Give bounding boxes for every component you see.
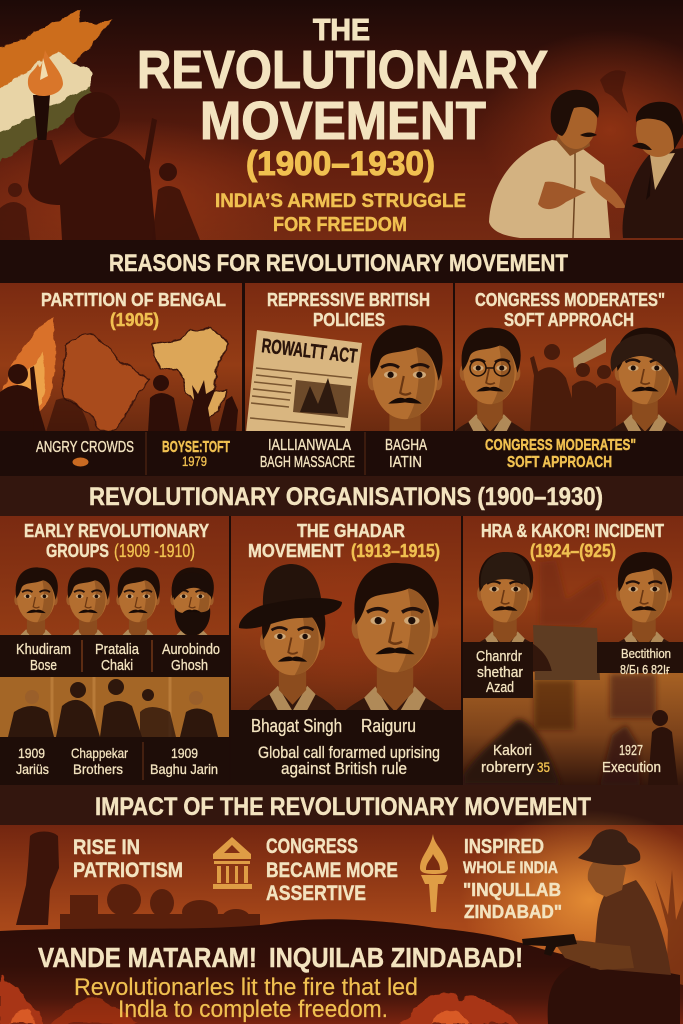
subtitle: INDIA’S ARMED STRUGGLE [215, 191, 466, 212]
text: inspired whole india: "INQULLAB [463, 880, 561, 900]
panel: early revolutionary groups [0, 516, 229, 737]
text: rise in patriotism: PATRIOTISM [73, 859, 183, 882]
name: khudiram bose: Bose [30, 657, 57, 674]
name box: bectithion: Bectithion [621, 646, 671, 661]
heading: THE GHADAR [297, 521, 405, 541]
portrait: rajguru [346, 562, 444, 710]
caption: massacre: BAGH MASSACRE [260, 454, 355, 471]
heading: PARTITION OF BENGAL [41, 290, 226, 310]
text: rise in patriotism: RISE IN [73, 836, 140, 859]
name: pratalia chaki [95, 641, 140, 674]
name box: chandrashekhar: Chanrdr [476, 648, 522, 665]
caption: massacre: IALLIANWALA [268, 437, 351, 454]
title: THE [313, 12, 370, 47]
heading [475, 290, 665, 330]
text: inspired whole india: WHOLE INDIA [463, 858, 558, 877]
heading [24, 521, 209, 561]
name: bhagat singh: Bhagat Singh [251, 716, 342, 736]
caption: bagha [385, 437, 427, 471]
subtitle [215, 191, 466, 236]
heading: (1909 -1910) [114, 541, 195, 561]
newspaper: rowlatt act: ROWALTT ACT [260, 335, 358, 368]
panel: impact [0, 810, 683, 1024]
map: bengal, light [152, 328, 228, 420]
tree at right edge [655, 870, 683, 1024]
name box: bectithion: 8/Бı 6 82Iғ [620, 662, 670, 677]
heading: (1905) [110, 310, 159, 330]
caption: 1927 execution: Execution [602, 759, 661, 776]
title [137, 12, 548, 151]
event: chappekar brothers [71, 745, 128, 777]
label strip: reasons captions [0, 283, 683, 476]
portraits: four revolutionaries [14, 567, 214, 635]
icon: tricolour brush flag [0, 10, 112, 165]
text: congress assertive: BECAME MORE [266, 859, 398, 882]
fire [0, 318, 56, 415]
silhouette: raised fist [16, 832, 59, 925]
caption: boyse toft: 1979 [182, 453, 207, 469]
name box: chandrashekhar [463, 642, 533, 698]
heading: EARLY REVOLUTIONARY [24, 521, 209, 541]
panel: ghadar movement [231, 516, 468, 785]
closing statement: Revolutionarles lit the fire that led [74, 974, 418, 1001]
closing statement [74, 974, 418, 1023]
name: aurobindo ghosh: Aurobindo [162, 641, 220, 658]
event: 1909 baghu jarin: Baghu Jarin [150, 761, 218, 777]
icon: flaming torch [28, 50, 63, 145]
pistol [522, 934, 577, 956]
event: 1909 baghu jarin: 1909 [171, 745, 198, 761]
ground with flames [0, 919, 683, 1024]
header banner [0, 0, 683, 280]
silhouette: torch bearer and followers [0, 70, 628, 240]
section heading: organisations [0, 476, 683, 516]
crowd with flag [530, 338, 616, 432]
caption: bagha: IATIN [389, 454, 422, 471]
panel: congress moderates [455, 283, 683, 431]
newspaper: rowlatt act [246, 330, 362, 432]
caption: kakori robbery [481, 742, 550, 776]
caption: congress moderates [485, 437, 636, 471]
caption: angry crowds: ANGRY CROWDS [36, 439, 134, 456]
section heading: reasons [0, 240, 683, 283]
heading: REPRESSIVE BRITISH [267, 290, 430, 310]
name: rajguru: Raiguru [361, 716, 416, 736]
portrait: bhagat singh in hat [238, 564, 342, 710]
text: rise in patriotism [73, 836, 183, 882]
text: congress assertive: CONGRESS [266, 835, 358, 858]
panel: repressive british policies [245, 283, 453, 431]
heading [41, 290, 226, 330]
portrait: man with turban [610, 328, 680, 431]
heading: GROUPS [46, 541, 109, 561]
panel: hra and kakori incident [458, 516, 683, 785]
caption: boyse toft: BOYSE:TOFT [162, 439, 230, 456]
description [258, 743, 440, 778]
name: khudiram bose [16, 641, 71, 674]
heading: (1913–1915) [351, 541, 440, 561]
name: aurobindo ghosh [162, 641, 220, 674]
caption: 1927 execution [602, 742, 661, 776]
text: inspired whole india [463, 836, 562, 922]
text: congress assertive [266, 835, 398, 905]
heading [267, 290, 430, 330]
text: congress assertive: ASSERTIVE [266, 882, 366, 905]
caption: kakori robbery: Kakori [493, 742, 532, 759]
name: aurobindo ghosh: Ghosh [171, 657, 208, 674]
portrait: bagha jatin [368, 325, 443, 431]
description: Global call forarmed uprising [258, 743, 440, 762]
caption: angry crowds [36, 439, 134, 466]
heading: SOFT APPROACH [504, 310, 634, 330]
slogan: INQUILAB ZINDABAD! [269, 942, 523, 973]
title dates: (1900–1930) [246, 145, 435, 183]
icon: classical building [213, 837, 252, 889]
caption: kakori robbery: robrerry [481, 759, 534, 776]
text: inspired whole india: INSPIRED [464, 836, 544, 858]
name box: bectithion [597, 642, 683, 677]
name: khudiram bose: Khudiram [16, 641, 71, 658]
title: MOVEMENT [200, 91, 486, 151]
figure: man in dark suit [623, 102, 683, 238]
portrait: execution figure [616, 552, 672, 642]
slogan: VANDE MATARAM! [38, 942, 257, 973]
text: inspired whole india: ZINDABAD" [464, 902, 562, 922]
portrait: chandrashekhar azad [477, 552, 552, 671]
slogan [38, 942, 523, 973]
panel: partition of bengal [0, 283, 243, 432]
heading [481, 521, 664, 561]
event: chappekar brothers: Chappekar [71, 745, 128, 761]
caption: massacre [260, 437, 355, 471]
event: 1909 baghu jarin [150, 745, 218, 777]
section heading: impact [0, 785, 683, 825]
section heading: reasons: REASONS FOR REVOLUTIONARY MOVEMENT [109, 250, 568, 277]
event strip: early groups [0, 737, 229, 785]
caption: bagha: BAGHA [385, 437, 427, 454]
heading: (1924–(925) [530, 541, 616, 561]
name strip [231, 710, 461, 785]
title: REVOLUTIONARY [137, 40, 548, 100]
heading [248, 521, 440, 561]
silhouette: angry crowd [0, 364, 238, 432]
silhouette: ruins and trees [60, 884, 260, 930]
event: 1909 jarius: 1909 [18, 745, 45, 761]
name: pratalia chaki: Chaki [101, 657, 133, 674]
figure: revolutionary with pistol [522, 829, 680, 1024]
subtitle: FOR FREEDOM [273, 214, 407, 236]
name box: chandrashekhar: shethar [477, 664, 523, 681]
caption: kakori robbery: 35 [537, 759, 550, 775]
scene: train robbery background [463, 560, 683, 785]
scene: trial figures [0, 677, 229, 737]
closing statement: Indla to complete freedom. [118, 996, 388, 1023]
event: chappekar brothers: Brothers [73, 761, 123, 777]
event: 1909 jarius: Jariüs [16, 761, 49, 777]
caption: 1927 execution: 1927 [619, 742, 643, 759]
map: divided india, dark [62, 335, 150, 430]
portrait: man with glasses [455, 328, 525, 431]
caption: congress moderates: SOFT APPROACH [507, 454, 612, 471]
name: pratalia chaki: Pratalia [95, 641, 140, 658]
name box: chandrashekhar: Azad [486, 679, 514, 696]
heading: MOVEMENT [248, 541, 344, 561]
caption: boyse toft [162, 439, 230, 469]
section heading: impact: IMPACT OF THE REVOLUTIONARY MOVEMENT [95, 793, 591, 821]
description: against British rule [281, 759, 407, 778]
icon: freedom torch [420, 834, 448, 912]
section heading: organisations: REVOLUTIONARY ORGANISATIONS (1900–1930) [89, 483, 603, 511]
heading: POLICIES [313, 310, 385, 330]
event: 1909 jarius [16, 745, 49, 777]
name strip [0, 635, 229, 677]
figure: man in white kurta [489, 90, 626, 238]
